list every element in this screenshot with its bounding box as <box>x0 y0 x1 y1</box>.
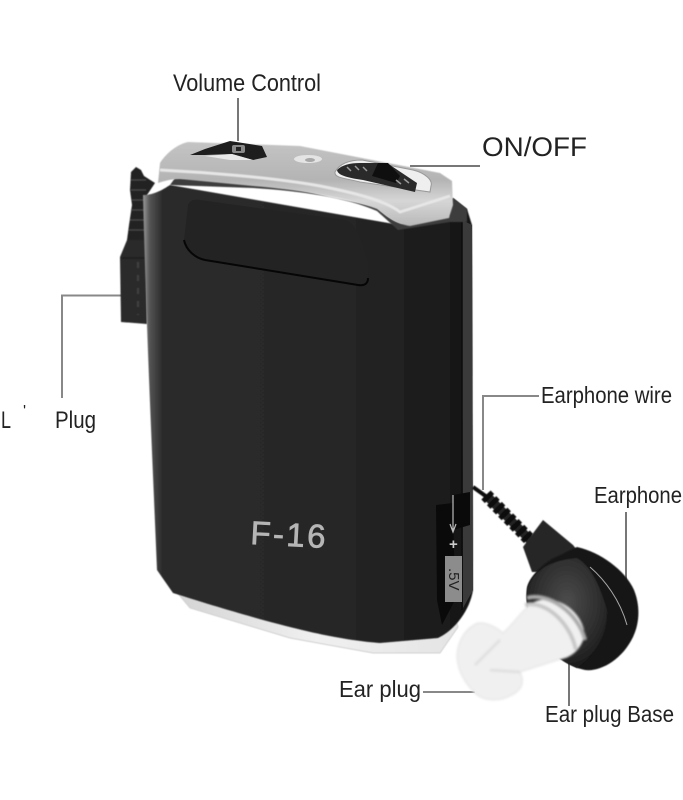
label: Earphone wire <box>483 382 672 490</box>
translucent ear plug <box>457 597 585 700</box>
model name F-16: F-16 <box>250 514 326 555</box>
silver bottom base <box>175 590 458 653</box>
earphone head and connector <box>523 520 638 670</box>
plug and ribbed cord <box>120 167 155 324</box>
label: Plug: Plug <box>55 407 96 434</box>
volume wheel <box>190 141 267 160</box>
label: Ear plug: Ear plug <box>339 676 421 702</box>
battery compartment marks: + <box>449 536 458 553</box>
ON/OFF switch <box>335 160 431 192</box>
right side strip <box>462 220 473 608</box>
label: ON/OFF: ON/OFF <box>482 132 587 162</box>
centre light <box>294 155 322 163</box>
label: Plug: L <box>1 407 11 434</box>
label: Plug: ' <box>23 403 26 420</box>
recessed window <box>184 200 368 285</box>
battery compartment marks: .5V <box>445 568 462 591</box>
label: Ear plug <box>339 676 475 702</box>
silver top cap <box>158 141 453 226</box>
earphone wire <box>473 487 532 542</box>
battery compartment marks <box>436 492 470 625</box>
device body <box>143 178 473 643</box>
dark lip under cap <box>170 178 467 230</box>
label: Plug <box>1 296 122 434</box>
label: Earphone <box>594 482 682 580</box>
label: Volume Control: Volume Control <box>173 70 321 97</box>
label: Ear plug Base <box>545 655 674 727</box>
